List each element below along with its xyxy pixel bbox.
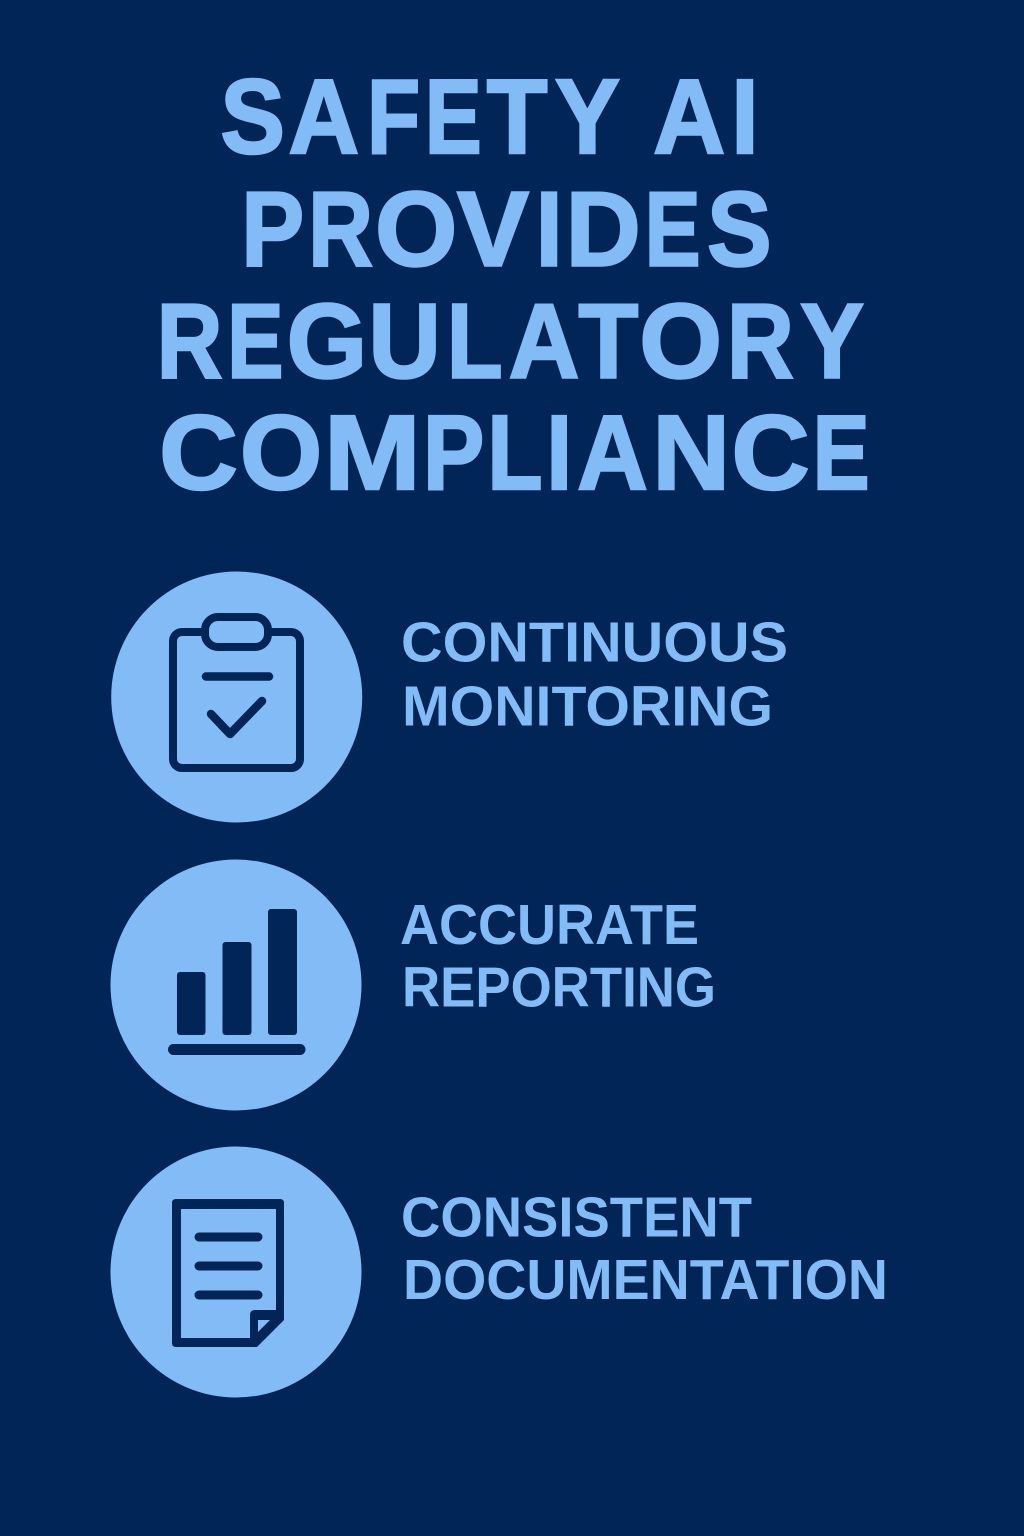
title: R [308, 170, 373, 288]
title: G [287, 282, 367, 400]
title: F [367, 58, 420, 176]
title: P [423, 394, 484, 512]
label: accurate reporting: ACCURATE [400, 893, 699, 957]
title: N [652, 394, 730, 512]
icon: document with folded corner [110, 1146, 362, 1398]
title: E [813, 394, 870, 512]
icon: bar chart [110, 860, 362, 1110]
title: U [368, 282, 441, 400]
title: V [457, 170, 529, 288]
item: continuous monitoring [111, 572, 788, 822]
title: I [731, 58, 759, 176]
title: C [732, 394, 810, 512]
title: I [546, 394, 572, 512]
title: D [566, 170, 641, 288]
title: R [727, 282, 794, 400]
label: continuous monitoring: MONITORING [402, 674, 773, 738]
title: E [425, 58, 482, 176]
title: Y [800, 282, 864, 400]
item: accurate reporting [110, 860, 716, 1110]
title: L [487, 394, 542, 512]
title: A [289, 58, 359, 176]
label: consistent documentation: DOCUMENTATION [403, 1248, 888, 1312]
title: T [578, 282, 638, 400]
title: O [375, 170, 457, 288]
label: accurate reporting [400, 893, 716, 1020]
title: R [157, 282, 222, 400]
title: Y [555, 58, 618, 176]
label: accurate reporting: REPORTING [402, 956, 716, 1020]
label: consistent documentation [401, 1186, 888, 1312]
title: S [220, 58, 285, 176]
title: C [159, 394, 238, 512]
title: M [324, 394, 420, 512]
title: T [487, 58, 547, 176]
item: consistent documentation [110, 1146, 888, 1398]
label: consistent documentation: CONSISTENT [401, 1186, 752, 1250]
title: A [509, 282, 579, 400]
label: continuous monitoring: CONTINUOUS [401, 610, 788, 674]
title [157, 58, 870, 512]
title: O [240, 394, 322, 512]
title: A [653, 58, 725, 176]
title: A [577, 394, 648, 512]
title: E [645, 170, 700, 288]
title: I [536, 170, 563, 288]
title: E [227, 282, 283, 400]
icon: clipboard with check mark [111, 572, 362, 822]
title: O [639, 282, 722, 400]
title: L [447, 282, 503, 400]
label: continuous monitoring [401, 610, 788, 738]
title: S [707, 170, 772, 288]
title: P [241, 170, 304, 288]
